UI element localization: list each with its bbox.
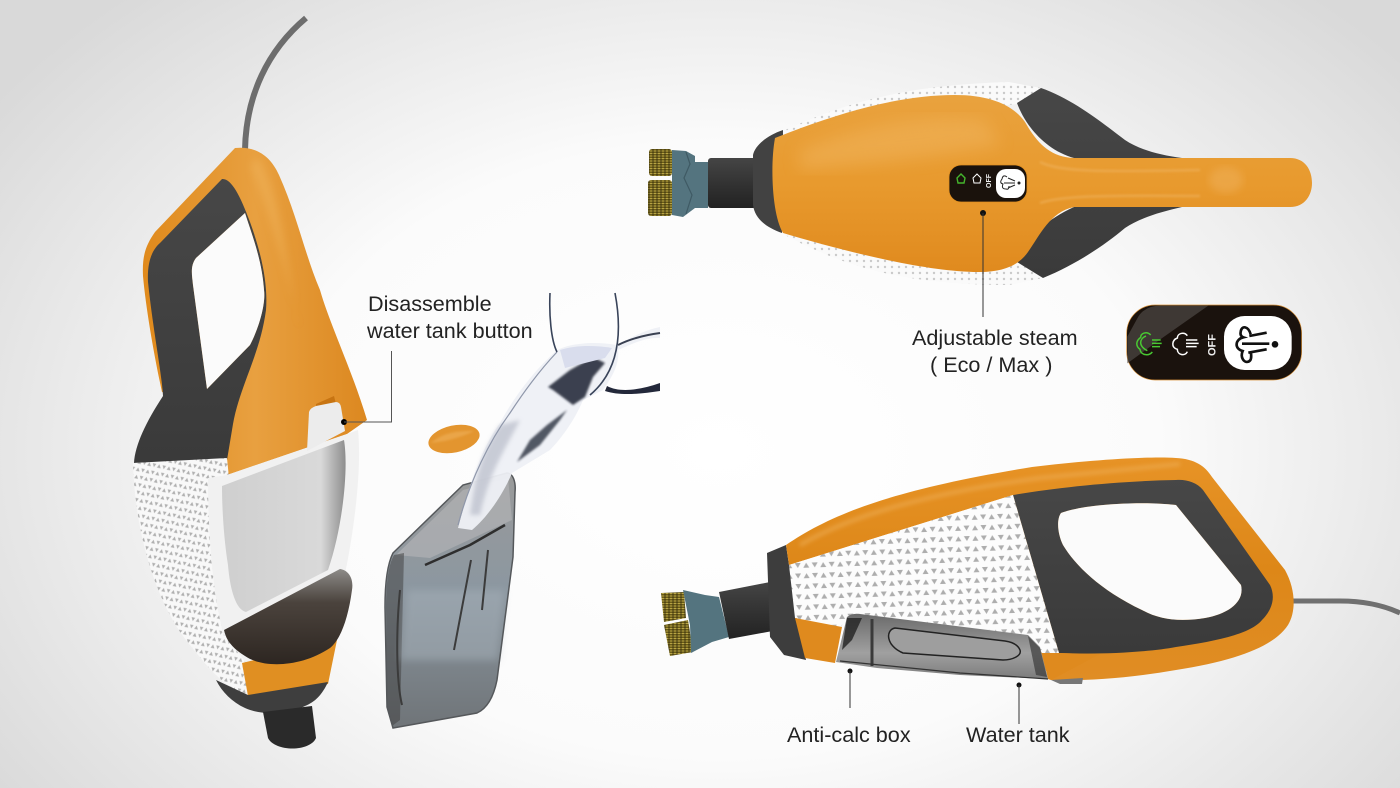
left device: upright exploded view [133, 18, 367, 748]
eco steam icon [1137, 333, 1162, 355]
water tank release button [307, 396, 345, 451]
dark tube [708, 158, 756, 208]
inner tank bay [222, 440, 346, 612]
lower-left orange [795, 618, 842, 663]
enlarged control panel [1127, 305, 1302, 380]
off label: OFF [1207, 334, 1219, 356]
callout: disassemble water tank button [344, 291, 533, 422]
shell highlight [800, 464, 1180, 545]
dark grip with handle opening [1013, 480, 1273, 654]
blue-grey collar [683, 590, 729, 653]
handle highlight [1040, 162, 1200, 203]
bottom device: side view [661, 457, 1400, 684]
dark end ring [767, 545, 806, 660]
steam button dot [1272, 341, 1278, 348]
callout: disassemble water tank button: water tank button [366, 318, 533, 343]
textured white sides [783, 82, 1043, 285]
dark base collar [216, 680, 328, 713]
orange shell upper [143, 148, 367, 475]
callout: adjustable steam: Adjustable steam [912, 325, 1078, 350]
callout dot [341, 419, 347, 425]
white textured panel [789, 495, 1059, 653]
clear water tank window [836, 614, 1048, 679]
orange lower band [242, 640, 337, 696]
callout: anti-calc box: Anti-calc box [787, 722, 911, 747]
removed orange tank cap [426, 420, 482, 458]
orange top shell [772, 95, 1312, 272]
callout: water tank [966, 682, 1070, 747]
dark ring [753, 130, 783, 233]
callout: disassemble water tank button: Disassemble [368, 291, 492, 316]
base tab [1051, 678, 1083, 684]
power cable [1291, 601, 1400, 613]
callout: adjustable steam: ( Eco / Max ) [930, 352, 1052, 377]
orange outer shell [786, 457, 1294, 680]
transparent water tank [385, 473, 515, 728]
orange front highlight [250, 158, 300, 330]
shell highlight [800, 118, 1000, 170]
steam nozzle [263, 706, 316, 748]
dark tube [719, 582, 778, 639]
anti-calc cup [224, 569, 352, 664]
bristle brush [661, 592, 693, 656]
max steam icon [1173, 333, 1199, 355]
white mode button [1224, 316, 1292, 370]
lower-right orange [1042, 653, 1100, 680]
control panel on device: OFF [986, 173, 993, 188]
callout: water tank: Water tank [966, 722, 1070, 747]
handle opening [1058, 503, 1242, 620]
power cable [245, 18, 306, 150]
handle opening [192, 213, 264, 389]
water stream pouring into tank [458, 293, 660, 530]
bristle brush [648, 149, 672, 216]
handle end highlight [1209, 167, 1243, 193]
dark handle grip [134, 179, 266, 463]
top device: top-down view [648, 82, 1312, 285]
blue-grey collar [672, 150, 708, 217]
callout: adjustable steam [912, 210, 1078, 377]
dark grip wings [1017, 88, 1182, 278]
steam button icon [1237, 327, 1269, 362]
control panel on device [949, 165, 1027, 202]
white housing frame [208, 430, 359, 664]
white textured side panel [133, 458, 248, 695]
callout: anti-calc box [787, 668, 911, 747]
